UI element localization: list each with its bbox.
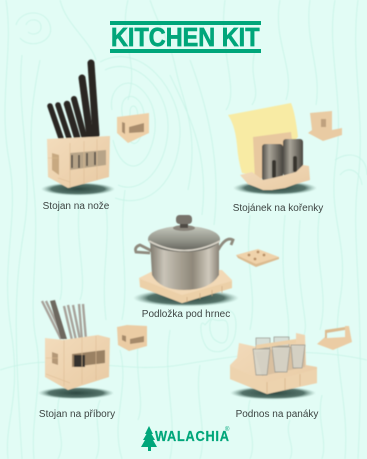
label: Podložka pod hrnec	[142, 309, 230, 320]
product: knife stand	[41, 63, 149, 196]
shadow	[133, 290, 239, 306]
mini model	[117, 113, 149, 143]
block	[47, 136, 110, 188]
trivet	[139, 270, 232, 303]
product: cutlery stand	[38, 300, 147, 399]
icon: tree	[141, 426, 157, 451]
mini model	[117, 325, 147, 351]
cutlery	[42, 301, 86, 340]
product: pot trivet	[133, 215, 279, 306]
shadow	[41, 182, 115, 196]
logo: Walachia: WALACHIA	[155, 428, 229, 444]
back board	[253, 132, 296, 180]
handles	[136, 245, 172, 258]
tray front rail	[256, 339, 296, 349]
title: KITCHEN KIT	[111, 24, 260, 52]
product: spice stand	[228, 103, 342, 195]
glasses	[253, 337, 305, 375]
mini model	[317, 326, 352, 350]
registered mark: ®	[225, 426, 230, 433]
shadow	[230, 386, 316, 400]
knives	[50, 63, 96, 138]
product: shot glass tray	[230, 326, 352, 400]
label: Podnos na panáky	[236, 409, 318, 420]
lid	[148, 226, 220, 252]
block	[45, 335, 110, 390]
knob	[173, 225, 195, 231]
napkin	[228, 103, 298, 175]
logo: Walachia	[141, 426, 230, 451]
label: Stojan na příbory	[39, 409, 115, 420]
tray	[240, 165, 310, 190]
tray	[230, 333, 317, 394]
mini model	[236, 249, 279, 266]
pot body	[150, 240, 219, 290]
shakers	[262, 144, 283, 181]
shadow	[38, 387, 114, 399]
label: Stojánek na kořenky	[233, 203, 323, 214]
shadow	[233, 181, 317, 195]
label: Stojan na nože	[43, 201, 110, 212]
mini model	[308, 111, 342, 141]
